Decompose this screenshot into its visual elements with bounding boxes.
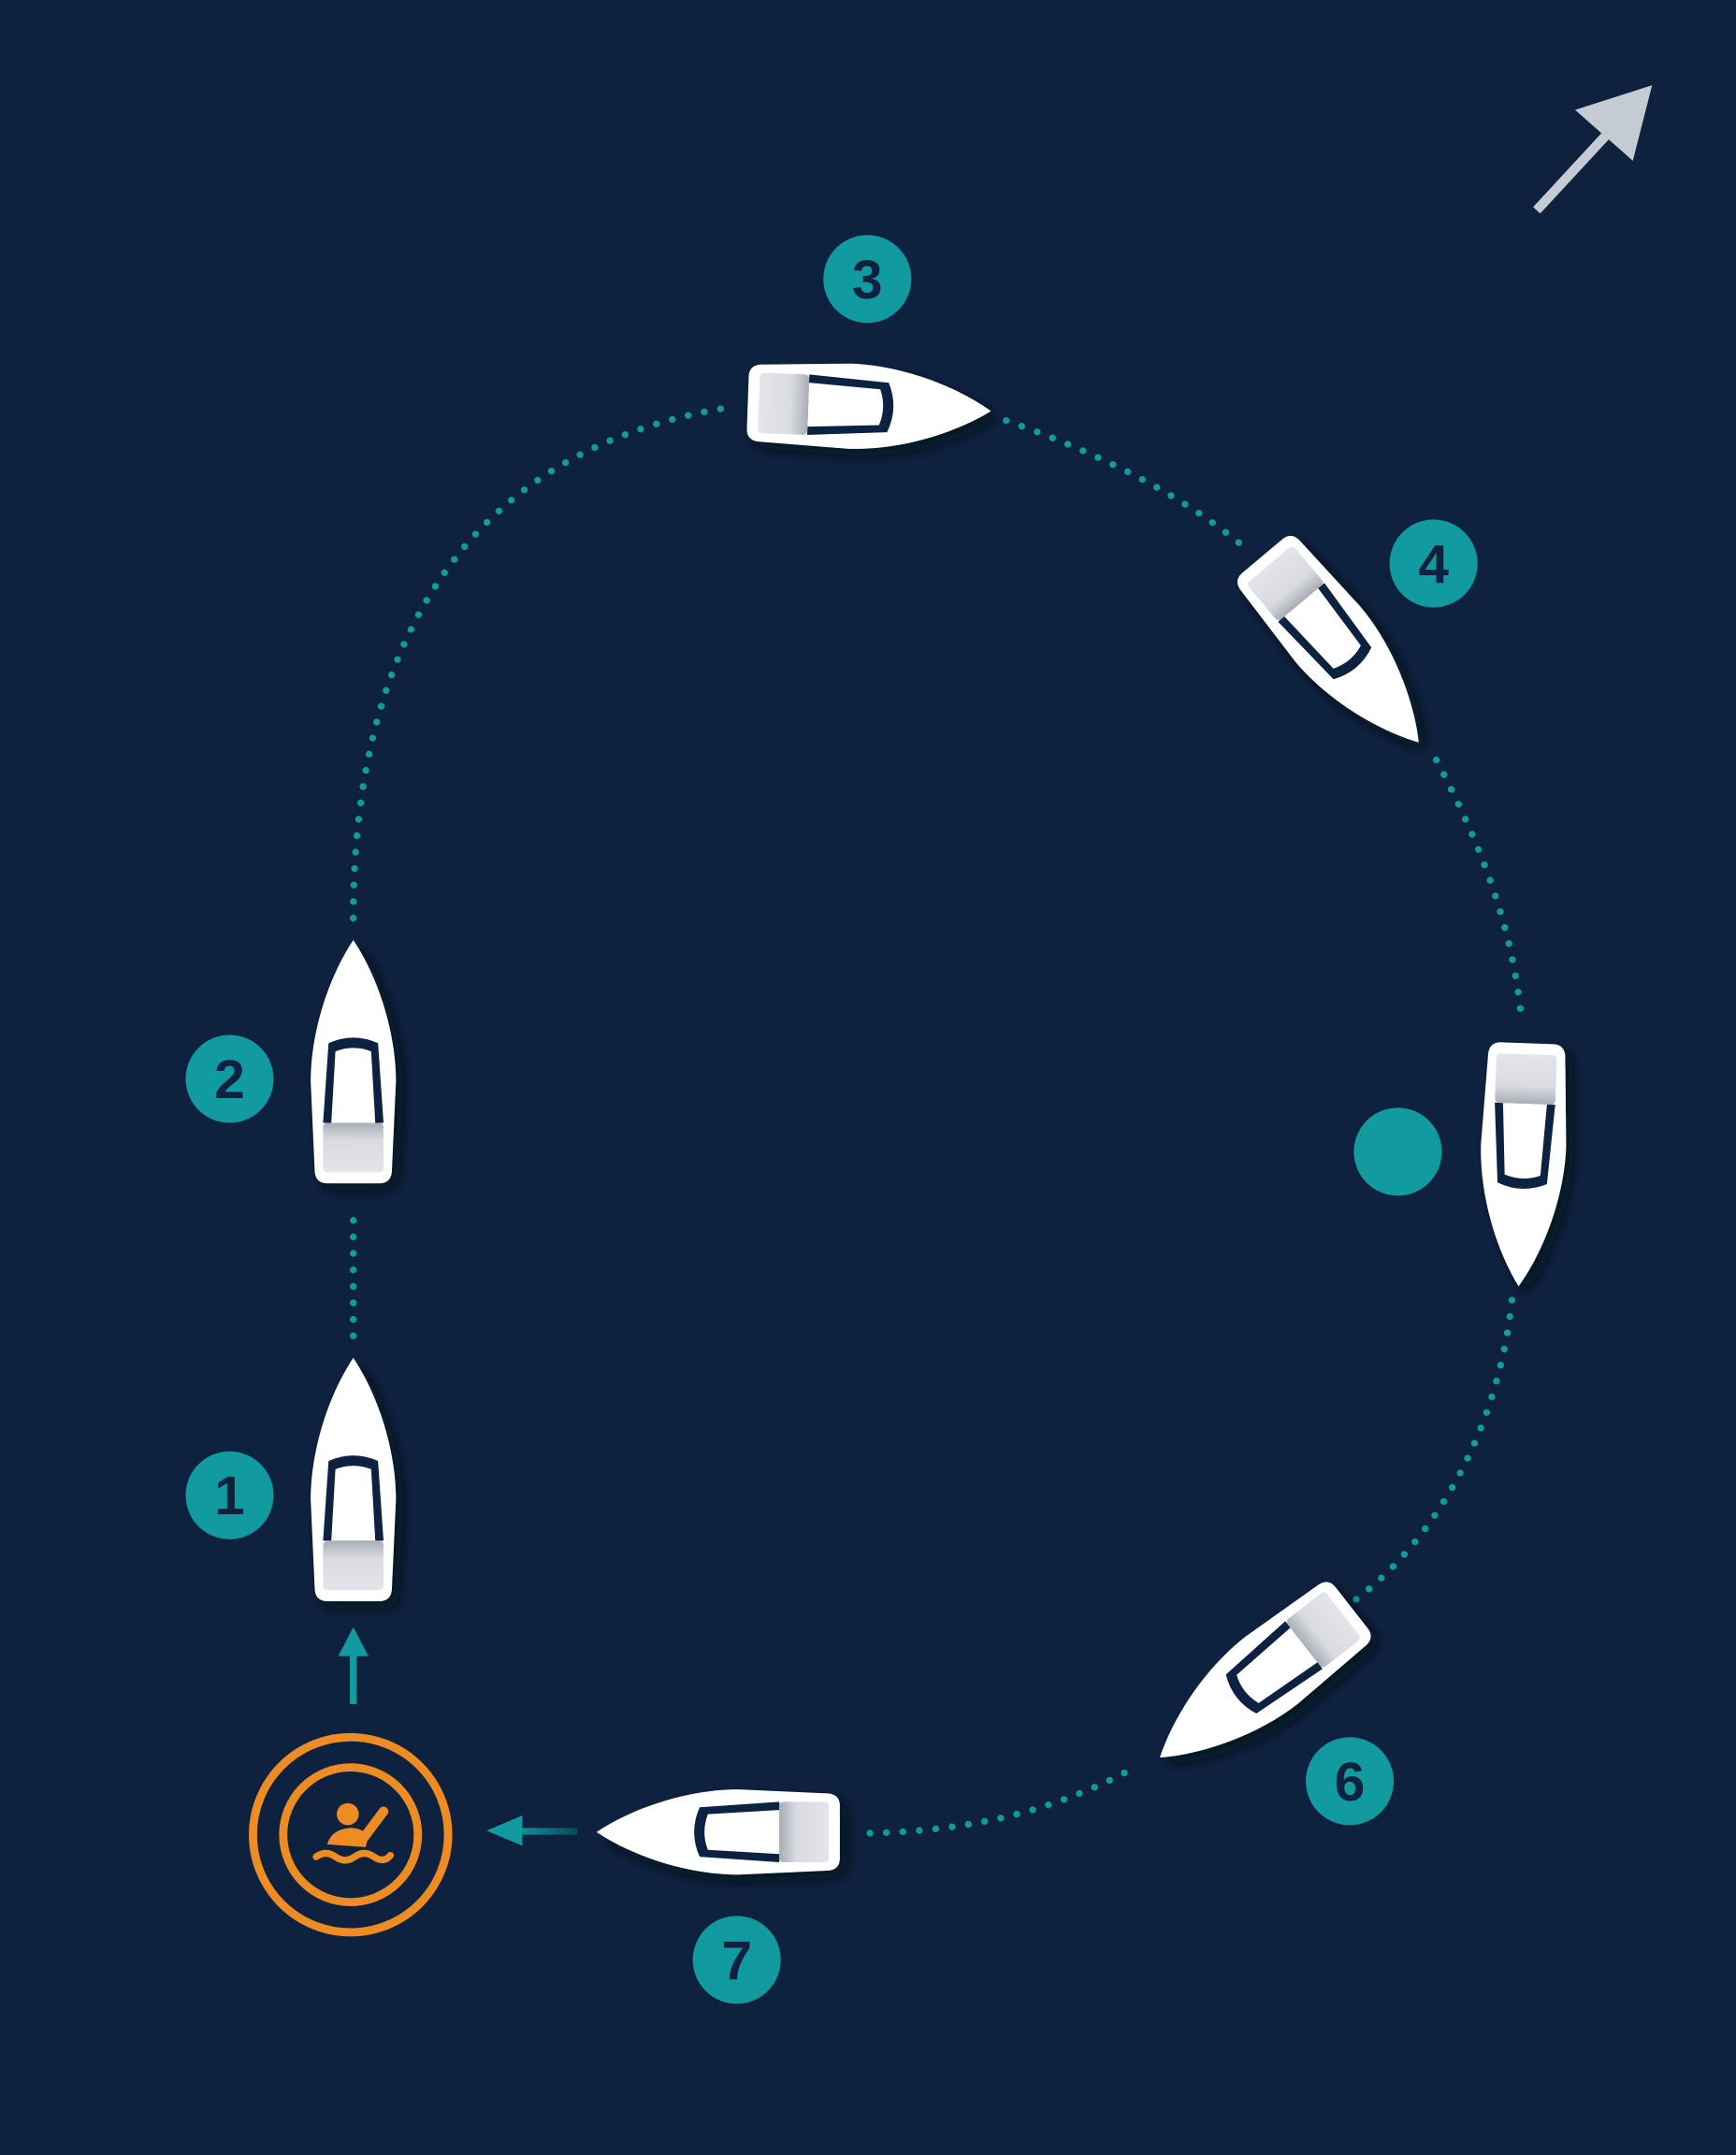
- boat 2: [311, 940, 396, 1183]
- boat 4: [1230, 528, 1452, 770]
- boat 5: [1476, 1042, 1570, 1288]
- marker 1: 1: [214, 1466, 245, 1526]
- step markers: [185, 235, 1478, 2003]
- boat 7: [597, 1789, 840, 1874]
- marker 6: 6: [1335, 1752, 1365, 1813]
- marker 1: [185, 1452, 273, 1540]
- marker 5: [1353, 1107, 1441, 1195]
- marker 2: [185, 1034, 273, 1122]
- marker 4: [1390, 519, 1478, 607]
- boat 6: [1134, 1574, 1378, 1791]
- marker 7: [693, 1916, 781, 2003]
- marker 6: [1306, 1737, 1394, 1825]
- marker 3: 3: [852, 250, 883, 311]
- marker 7: 7: [721, 1931, 752, 1991]
- marker 3: [823, 235, 911, 323]
- marker 4: 4: [1418, 534, 1449, 595]
- arrow: left toward swimmer: [486, 1815, 577, 1845]
- marker 2: 2: [214, 1049, 245, 1110]
- arrow: wind direction: [1537, 85, 1652, 210]
- arrow: up from swimmer: [339, 1627, 369, 1704]
- icon: person overboard: [253, 1737, 448, 1932]
- dotted course path: [354, 408, 1522, 1833]
- boat 1: [311, 1358, 396, 1601]
- boat 3: [746, 360, 992, 454]
